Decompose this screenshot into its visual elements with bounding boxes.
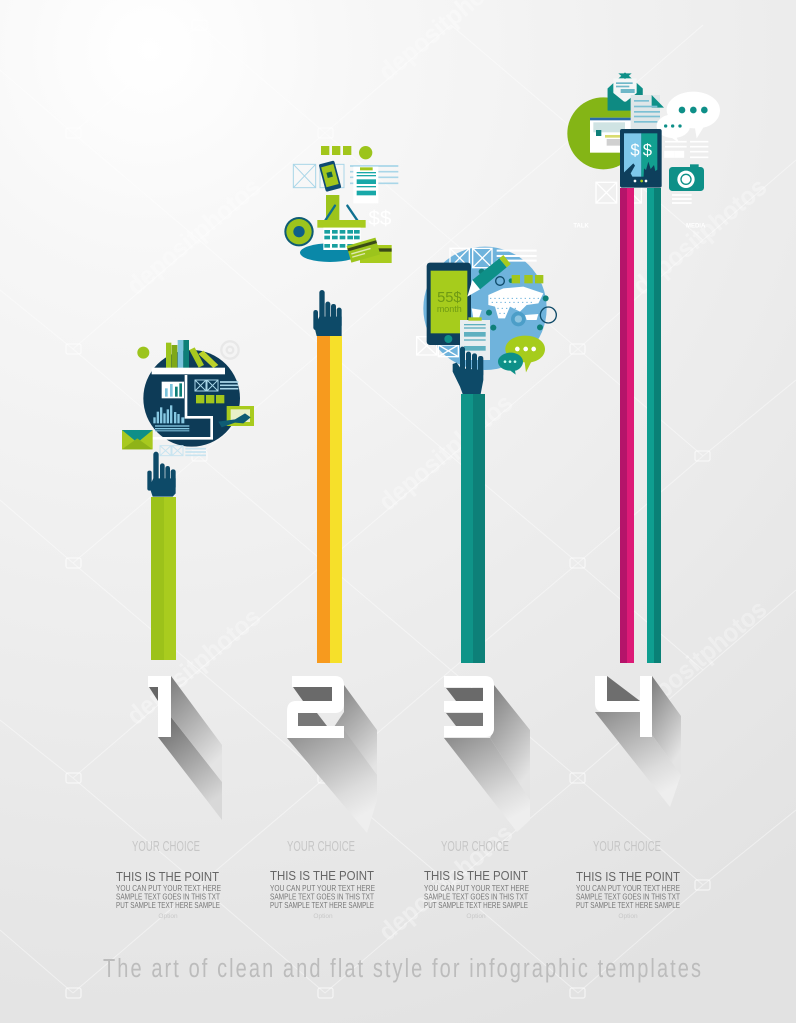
text block: column 4: YOUR CHOICE — [593, 838, 661, 855]
number 1 with long shadow — [148, 676, 222, 820]
icon: concentric circle — [511, 312, 526, 326]
icon: tablet: $ — [630, 141, 640, 160]
watermark pattern: depositphotos — [627, 172, 772, 301]
tagline: The art of clean and flat style for infographic templates — [103, 953, 701, 983]
icon: phone: month — [437, 304, 462, 314]
icon: browser window — [590, 118, 632, 153]
icon: document — [460, 317, 490, 360]
icon: speech bubble small — [657, 114, 690, 143]
icon: wireframe boxes — [195, 380, 238, 391]
icon: gear — [221, 341, 239, 359]
icon: tablet — [620, 129, 662, 188]
icon: envelope — [122, 430, 153, 449]
icon: green circle — [567, 97, 639, 169]
icon: document — [631, 95, 664, 132]
icon: basket — [317, 195, 366, 250]
icon: ring — [540, 307, 556, 323]
icon: wrench card — [218, 406, 254, 427]
text block: column 2: SAMPLE TEXT GOES IN THIS TXT — [270, 892, 374, 902]
text block: column 1: YOUR CHOICE — [132, 838, 200, 855]
watermark pattern: depositphotos — [121, 172, 266, 301]
icon: lime squares — [321, 146, 351, 155]
icon: phone: 55$ — [437, 290, 462, 306]
text block: column 1 — [116, 838, 221, 920]
icon: phone — [319, 160, 341, 192]
text block: column 3: Option — [466, 913, 486, 920]
label: talk: TALK — [573, 223, 590, 229]
text block: column 4: SAMPLE TEXT GOES IN THIS TXT — [576, 892, 680, 902]
icon: lime ball — [137, 347, 149, 359]
icon: envelope — [608, 72, 643, 111]
icon: camera — [669, 164, 704, 191]
icon: connector line — [150, 375, 212, 438]
text block: column 1: PUT SAMPLE TEXT HERE SAMPLE — [116, 900, 220, 910]
column 4 illustration: tablet and media — [567, 72, 720, 229]
bar 3 — [461, 394, 485, 663]
number 3 with long shadow — [444, 676, 530, 832]
text block: column 3: PUT SAMPLE TEXT HERE SAMPLE — [424, 900, 528, 910]
text block: column 1: THIS IS THE POINT — [116, 869, 219, 884]
icon: map dots — [479, 269, 549, 331]
text block: column 4 — [576, 838, 680, 920]
icon: navy circle — [143, 350, 240, 447]
text block: column 2: Option — [313, 913, 333, 920]
text block: column 1: SAMPLE TEXT GOES IN THIS TXT — [116, 892, 220, 902]
text block: column 2: PUT SAMPLE TEXT HERE SAMPLE — [270, 900, 374, 910]
text block: column 4: Option — [618, 913, 638, 920]
icon: lime ball — [359, 146, 372, 159]
icon: hand — [147, 452, 176, 497]
text block: column 4: YOU CAN PUT YOUR TEXT HERE — [576, 883, 680, 893]
watermark pattern: depositphotos — [121, 602, 266, 731]
watermark pattern: depositphotos — [373, 818, 518, 947]
text block: column 3 — [424, 838, 529, 920]
column 1 illustration: data circle — [122, 340, 254, 497]
text block: column 2: YOU CAN PUT YOUR TEXT HERE — [270, 883, 375, 893]
icon: wireframe boxes — [293, 164, 398, 188]
label: media: MEDIA — [686, 223, 706, 229]
icon: small ring — [496, 277, 504, 285]
bar chart — [153, 405, 189, 431]
icon: speech bubble large — [667, 92, 720, 138]
icon: wireframes — [417, 248, 537, 357]
icon: target donut — [284, 217, 314, 246]
icon: credit cards — [347, 238, 392, 263]
text block: column 3: YOUR CHOICE — [441, 838, 509, 855]
icon: hand — [453, 347, 483, 394]
icon: pencil — [467, 255, 511, 297]
icon: document — [353, 167, 378, 203]
number 4 with long shadow — [595, 676, 681, 807]
icon: lime squares — [512, 275, 543, 283]
icon: faint wireframes — [160, 446, 206, 456]
icon: chat bubbles — [498, 336, 545, 375]
column 3 illustration: world and phone — [417, 247, 556, 394]
number 2 with long shadow — [287, 676, 377, 833]
watermark pattern: depositphotos — [373, 388, 518, 517]
text block: column 2 — [270, 838, 375, 920]
icon: tablet: $ — [643, 141, 652, 160]
icon: globe — [423, 247, 547, 370]
text block: column 2: YOUR CHOICE — [287, 838, 355, 855]
icon: world map — [472, 287, 543, 320]
text block: column 4: PUT SAMPLE TEXT HERE SAMPLE — [576, 900, 680, 910]
icon: dollar signs: $$ — [368, 207, 392, 230]
icon: phone — [427, 263, 471, 345]
icon: lime squares — [196, 395, 224, 403]
icon: books — [166, 340, 218, 368]
bar 4 — [620, 188, 661, 663]
icon: document — [162, 382, 184, 398]
icon: basket shadow ellipse — [300, 243, 360, 262]
icon: text lines and wireframes — [596, 142, 708, 203]
bar 2 — [317, 336, 342, 663]
icon: hand — [313, 290, 342, 336]
icon: shelf — [152, 368, 225, 374]
text block: column 4: THIS IS THE POINT — [576, 869, 680, 884]
text block: column 1: Option — [158, 913, 178, 920]
text block: column 1: YOU CAN PUT YOUR TEXT HERE — [116, 883, 221, 893]
column 2 illustration: shopping basket — [284, 146, 398, 336]
text block: column 2: THIS IS THE POINT — [270, 868, 374, 883]
bar 1 — [151, 497, 176, 660]
text block: column 3: SAMPLE TEXT GOES IN THIS TXT — [424, 892, 528, 902]
text block: column 3: YOU CAN PUT YOUR TEXT HERE — [424, 883, 529, 893]
watermark pattern: depositphotos — [627, 594, 772, 723]
text block: column 3: THIS IS THE POINT — [424, 868, 528, 883]
